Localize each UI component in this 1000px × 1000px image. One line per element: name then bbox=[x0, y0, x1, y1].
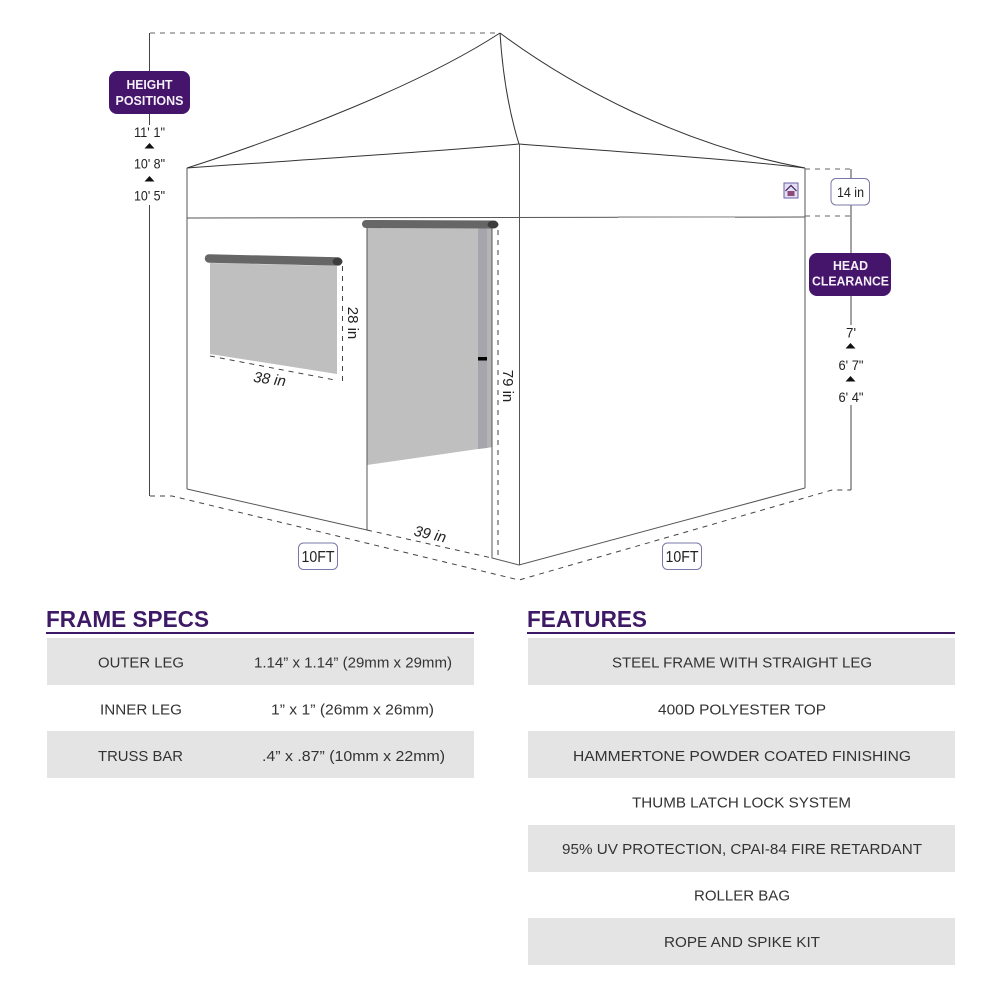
frame specs rows: TRUSS BAR bbox=[98, 749, 183, 765]
window roller bbox=[209, 258, 342, 265]
badge: head clearance: CLEARANCE bbox=[812, 274, 889, 288]
frame specs rows: 1” x 1” (26mm x 26mm) bbox=[271, 702, 434, 718]
badge: height positions: POSITIONS bbox=[116, 94, 184, 108]
door height label: 79 in bbox=[499, 370, 516, 402]
badge: height positions bbox=[109, 71, 190, 114]
badge: height positions: HEIGHT bbox=[126, 78, 173, 92]
logo icon bbox=[784, 183, 798, 198]
window shade bbox=[210, 263, 337, 374]
features rows: STEEL FRAME WITH STRAIGHT LEG bbox=[612, 656, 872, 672]
badge: head clearance: HEAD bbox=[833, 259, 868, 273]
height values: 10' 8" bbox=[134, 156, 165, 172]
door width label: 39 in bbox=[412, 523, 448, 547]
valance and walls bbox=[187, 144, 805, 565]
canopy roof bbox=[187, 33, 805, 168]
head clearance values: 6' 7" bbox=[838, 357, 864, 373]
features rows: ROLLER BAG bbox=[694, 888, 790, 904]
valance height label: 14 in bbox=[837, 184, 864, 200]
features rows: 95% UV PROTECTION, CPAI-84 FIRE RETARDANT bbox=[562, 842, 922, 858]
frame specs heading: FRAME SPECS bbox=[46, 606, 209, 632]
door roller bbox=[366, 221, 498, 228]
frame specs rows: 1.14” x 1.14” (29mm x 29mm) bbox=[254, 656, 452, 672]
height values bbox=[134, 124, 165, 204]
frame specs rows: OUTER LEG bbox=[98, 656, 184, 672]
badge: head clearance bbox=[809, 253, 891, 296]
features rows: 400D POLYESTER TOP bbox=[658, 702, 826, 718]
panel: features bbox=[527, 606, 955, 965]
tent illustration bbox=[187, 33, 805, 565]
valance height label bbox=[831, 178, 870, 205]
left width label: 10FT bbox=[302, 549, 335, 566]
dimension lines bbox=[150, 33, 851, 580]
head clearance values: 6' 4" bbox=[838, 389, 864, 405]
head clearance values: 7' bbox=[846, 324, 856, 340]
right width label bbox=[662, 543, 702, 570]
features rows bbox=[562, 656, 922, 951]
features heading: FEATURES bbox=[527, 606, 647, 632]
window width label: 38 in bbox=[252, 369, 287, 390]
head clearance values bbox=[838, 324, 864, 405]
frame specs rows bbox=[98, 656, 452, 765]
door opening shade bbox=[367, 228, 492, 465]
frame specs rows: INNER LEG bbox=[100, 702, 182, 718]
left width label bbox=[298, 543, 338, 570]
panel: frame specs bbox=[46, 606, 474, 778]
features rows: THUMB LATCH LOCK SYSTEM bbox=[632, 796, 851, 812]
height values: 10' 5" bbox=[134, 188, 165, 204]
right width label: 10FT bbox=[666, 549, 699, 566]
frame specs rows: .4” x .87” (10mm x 22mm) bbox=[262, 749, 445, 765]
features rows: HAMMERTONE POWDER COATED FINISHING bbox=[573, 749, 911, 765]
window height label: 28 in bbox=[344, 307, 361, 339]
features rows: ROPE AND SPIKE KIT bbox=[664, 935, 820, 951]
height values: 11' 1" bbox=[134, 124, 165, 140]
